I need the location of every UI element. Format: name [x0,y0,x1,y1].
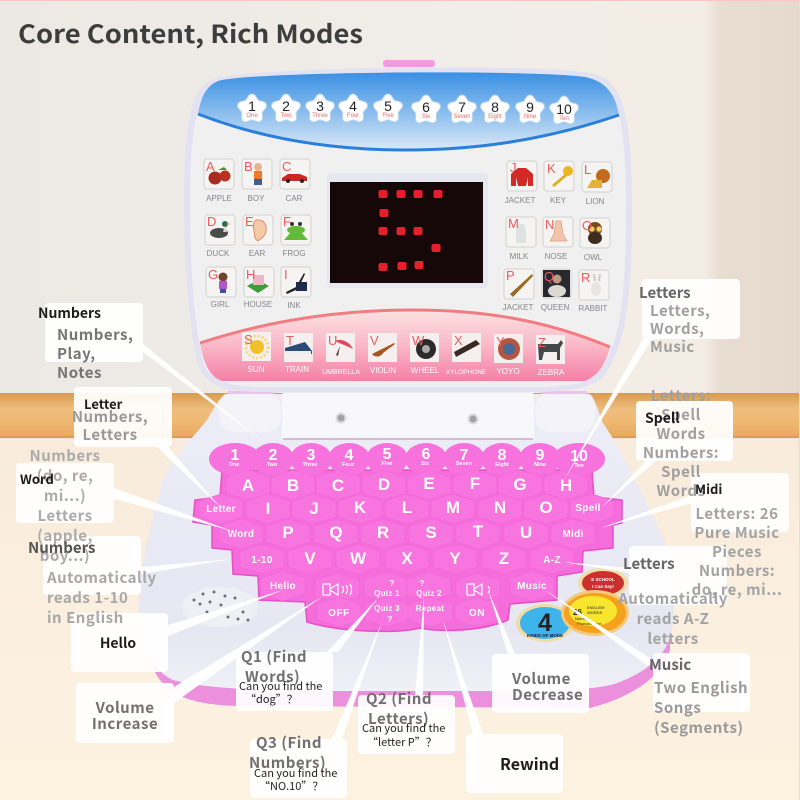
hinge screws [336,414,478,424]
star numerals: Six [422,114,430,120]
star numerals: Nine [524,114,537,120]
star numerals: One [246,113,258,119]
function key labels: Quiz 1 [374,589,400,598]
tile captions left: GIRL [211,300,230,309]
star numerals: 1 [248,98,256,114]
number key labels: 2 [269,447,278,464]
tile captions left: INK [287,301,301,310]
callout: Numbers (top left): Numbers [38,303,101,323]
callout: Music: (Segments) [654,717,744,738]
tile letters right: J [510,160,516,175]
callout: Letter: Letter [84,394,123,413]
callout: Rewind: Rewind [500,751,559,775]
number key labels: 1 [231,447,240,464]
tile icons bottom [246,336,563,360]
letter key labels: Midi [562,529,584,540]
callout: Midi: Pure Music [694,522,780,543]
number key labels: One [229,462,239,468]
callout: Q3 Find Numbers [249,732,347,798]
callout: Q2 Find Letters [358,688,455,754]
callout: Numbers 1-10: reads 1-10 [47,587,128,608]
tile captions bottom: WHEEL [411,366,440,375]
star numerals: 2 [282,98,290,114]
callout: Midi: Pieces [712,541,762,562]
function key labels: Hello [270,581,296,592]
pink keypad [193,443,622,631]
letter key labels: K [354,498,367,517]
tile letters left [206,159,291,282]
tile captions right: OWL [584,253,603,262]
letter key labels: G [513,475,527,494]
callout: Volume Increase: Increase [92,713,158,734]
stickers: I Can Say! [592,584,614,589]
tile letters right: M [508,216,519,231]
hexagon keys [199,470,614,627]
tile letters bottom: V [370,333,379,348]
callout: Word: Letters [37,505,93,526]
tile captions bottom: XYLOPHONE [446,369,487,376]
letter key labels: Z [499,549,509,568]
tile letters left: F [283,214,291,229]
icon: volume increase [323,584,352,595]
function key labels: Music [517,581,547,592]
callout: Spell: Words [656,423,706,444]
label: Numbers over 1-10 callout: Numbers [28,537,95,558]
function key labels: ? [387,615,393,624]
letter key labels: D [378,475,390,494]
stickers: Normal [575,616,588,621]
function key labels: OFF [328,608,350,619]
function key labels: ON [469,608,485,619]
function key labels: ? [419,579,425,588]
bottom picture tiles S to Z [242,332,565,377]
callout: Q3 Find Numbers: “NO.10”？ [259,778,323,794]
tile letters bottom: Y [496,334,505,349]
callout: Q1 Find Words: Can you find the [239,678,322,694]
callout: Numbers (top left): Play, [57,343,96,364]
tile captions right: MILK [510,252,529,261]
number key labels: Ten [574,463,584,469]
callout: Spell: Numbers: [643,442,719,463]
callout: Spell: Spell [661,461,701,482]
letter key labels: Q [329,523,343,542]
tile captions right: RABBIT [579,304,608,313]
tile letters left: B [244,159,253,174]
callout: Q2 Find Letters: Q2 (Find [366,688,432,709]
tile captions left: APPLE [206,194,232,203]
tile captions bottom: UMBRELLA [322,369,360,376]
tile letters bottom [244,332,546,350]
callout: Letters A-Z: Automatically [617,588,728,609]
star numerals: Two [280,113,292,119]
number key labels: Five [381,461,393,467]
stickers [516,568,629,642]
laptop lid [184,60,632,392]
callout: Numbers (top left): Numbers, [57,324,133,345]
star numerals: 9 [526,99,534,115]
star numerals: 4 [349,98,357,114]
number key labels: Six [421,461,430,467]
blue header band [198,72,619,150]
tile captions bottom: TRAIN [285,365,309,374]
tile captions right: QUEEN [541,303,569,312]
number key labels: Two [267,462,278,468]
callout: Numbers 1-10: in English [47,607,124,628]
callout: Spell: Words [656,480,706,501]
letter key labels: Letter [206,504,236,515]
callout: Volume Increase [76,683,174,743]
callout: Q3 Find Numbers: Q3 (Find [256,732,322,753]
tile letters left: D [207,214,216,229]
top row lobes [209,443,605,475]
tile captions right: KEY [550,196,567,205]
callout: Volume Decrease: Decrease [512,684,583,705]
letter key labels: O [539,498,553,517]
callout: Midi: Numbers: [699,560,775,581]
tile icons right [510,166,610,297]
title: Core Content, Rich Modes [18,15,363,51]
callout: Volume Decrease: Volume [511,668,571,689]
tile captions right: JACKET [503,303,533,312]
letter key labels: U [520,523,532,542]
stickers: ENGLISH [587,605,605,610]
callout: Letters (top right): Letters, [650,300,710,321]
function key labels [270,579,547,624]
letter key labels: E [423,474,435,493]
callout: Letters A-Z [617,546,728,649]
function key labels: Quiz 2 [416,589,442,598]
laptop base [139,391,674,708]
tile captions right [503,196,608,313]
letter key labels: B [287,476,299,495]
star numerals: Ten [559,116,569,122]
tile captions left: DUCK [207,249,230,258]
callout: Music: Music [649,654,691,675]
star numerals: 10 [556,101,572,117]
letter key labels: Word [228,529,254,540]
icon: volume decrease [467,584,490,595]
tile captions left: HOUSE [244,300,272,309]
tile captions right: LION [586,197,605,206]
hinge [282,393,534,440]
number key labels: Seven [456,461,473,467]
callout: Word: Word [20,469,54,488]
number key labels: Three [303,462,317,468]
callout: Word: mi...) [44,485,86,506]
callout: Numbers 1-10 [43,536,157,628]
star numerals: 8 [491,99,499,115]
letter key labels: 1-10 [251,555,273,566]
tile letters right: N [545,217,554,232]
callout: Spell: Letters: [651,385,711,406]
callout: Letters A-Z: Letters [623,553,675,574]
callout: Q2 Find Letters: Letters) [368,708,429,729]
letter key labels: L [402,498,412,517]
left letter tiles A to I [204,159,311,310]
number key labels [229,446,588,469]
tile letters bottom: W [412,333,425,348]
function key labels: Repeat [416,604,444,613]
star numerals: 6 [422,99,430,115]
callout: Midi: Letters: 26 [695,503,779,524]
letter key labels: A [242,476,254,495]
callout: Q2 Find Letters: Can you find the [362,720,445,736]
stickers: 4 [538,609,552,637]
tile letters bottom: U [328,333,337,348]
letter key labels: W [350,549,367,568]
callout: Letter: Letters [82,424,138,445]
tile captions bottom [248,365,565,377]
callout: Music: Two English [654,677,748,698]
tile letters right: L [584,162,591,177]
number key labels: 4 [345,447,354,464]
number key labels: 6 [422,446,431,463]
callout: Q1 Find Words: Q1 (Find [241,646,307,667]
letter key labels [206,474,601,568]
star numerals: Seven [453,114,471,120]
callout: Q3 Find Numbers: Numbers) [249,752,326,773]
LED dots forming 5 [378,190,442,271]
callout: Letter: Numbers, [72,406,148,427]
letter key labels: Spell [575,503,601,514]
letter key labels: I [266,499,270,518]
callout: Midi: do, re, mi... [692,579,782,600]
callout: Numbers 1-10: Automatically [46,567,157,588]
number key labels: Eight [495,462,509,468]
callout: Letters (top right): Letters [639,282,691,303]
tile captions bottom: VIOLIN [370,366,396,375]
tile letters bottom: S [244,332,253,347]
function key labels: Quiz 3 [374,604,400,613]
star numerals: 7 [458,99,466,115]
letter key labels: R [377,523,389,542]
tile captions bottom: ZEBRA [538,368,565,377]
callout: Letters A-Z: letters [647,628,699,649]
leader lines [114,339,692,739]
callout: Numbers (top left) [38,303,143,383]
pink footer band [200,310,610,381]
star numerals: 5 [384,98,392,114]
callout: Q2 Find Letters: “letter P”？ [367,734,437,750]
letter key labels: X [401,549,413,568]
stickers: E SCHOOL [591,577,615,582]
tile captions right: JACKET [505,196,535,205]
tile letters right: P [506,268,515,283]
callout: Hello [71,613,168,672]
tile letters left: G [208,267,218,282]
tile captions left: EAR [249,249,265,258]
speaker grille [182,587,258,627]
star numerals: Eight [488,114,502,120]
letter key labels: P [282,523,294,542]
callout: Spell: Spell [645,408,680,428]
tile letters bottom: X [454,333,463,348]
tile icons left [208,163,308,294]
tile letters right [506,160,592,285]
callout: Music: Songs [654,697,701,718]
callout: Q3 Find Numbers: Can you find the [254,765,337,781]
star numerals: Five [382,113,394,119]
label: Midi: Midi [695,479,722,498]
letter key labels: N [494,498,506,517]
letter key labels: V [304,549,316,568]
callout: Spell [636,385,733,501]
tile letters right: K [547,161,556,176]
body [139,394,674,691]
stickers: KINDS OF MODE [527,633,563,638]
tile captions left: BOY [248,194,265,203]
callout: Volume Increase: Volume [95,697,154,718]
number key labels: 8 [498,447,507,464]
callout: Word: Numbers [30,445,100,466]
tile letters left: I [284,267,288,282]
tile letters left: E [245,214,254,229]
callout: Q1 Find Words: “dog”？ [245,691,298,707]
callout: Word: (apple, [37,525,93,546]
callout: Letters (top right): Words, [650,318,704,339]
number key labels: 7 [460,447,469,464]
tile letters left: C [282,159,291,174]
letter key labels: A-Z [543,555,561,566]
callout: Letters A-Z: reads A-Z [637,608,709,629]
callout: Word: (do, re, [37,465,93,486]
letter key labels: M [446,498,460,517]
letter key labels: C [332,476,344,495]
letter key labels: J [309,499,319,518]
callout: Hello: Hello [100,633,136,653]
callout: Word [16,445,114,566]
number key labels: Nine [534,462,546,468]
tile captions left: CAR [286,194,303,203]
callout: Letters (top right): Music [650,336,695,357]
star numerals [246,98,572,122]
letter key labels: F [470,474,480,493]
callout: Music [649,653,750,738]
tile letters bottom: Z [538,335,546,350]
callout: Letter [72,387,172,447]
star numerals: Three [312,113,328,119]
letter key labels: T [473,522,484,541]
letter key labels: S [425,523,437,542]
callout: Word: boy...) [40,545,90,566]
tile letters bottom: T [286,333,294,348]
tile captions bottom: YOYO [496,367,520,376]
tile letters left: H [246,267,255,282]
number key labels: 9 [536,447,545,464]
pink underside [153,630,670,708]
tile captions bottom: SUN [248,365,265,374]
number key labels: Four [342,462,355,468]
stickers: 26 [573,608,582,617]
LED screen [327,173,488,288]
callout: Q1 Find Words [236,646,333,711]
stickers: Pronunciation [577,621,601,626]
star numerals: 3 [316,98,324,114]
letter key labels: H [560,476,572,495]
callout: Midi [691,473,789,600]
right letter tiles J to R [503,160,612,313]
number key labels: 10 [570,448,588,465]
callout: Q1 Find Words: Words) [245,666,300,687]
tile letters right: Q [544,269,554,284]
tile letters right: R [581,270,590,285]
callout: Letters (top right) [639,279,740,357]
tile captions right: NOSE [545,252,567,261]
tile captions left [206,194,306,310]
callout: Rewind [466,734,563,793]
number key labels: 3 [307,447,316,464]
callout: Spell: Spell [661,404,701,425]
tile letters left: A [206,159,215,174]
callout: Volume Decrease [492,654,589,713]
letter key labels: Y [449,549,461,568]
callout: Numbers (top left): Notes [57,362,102,383]
star numerals: Four [347,113,359,119]
tile captions left: FROG [282,249,306,258]
number stars 1 to 10 [242,98,574,120]
tile letters right: O [582,218,592,233]
stickers: WORDS [587,610,603,615]
function key labels: ? [389,579,395,588]
number key labels: 5 [383,446,392,463]
